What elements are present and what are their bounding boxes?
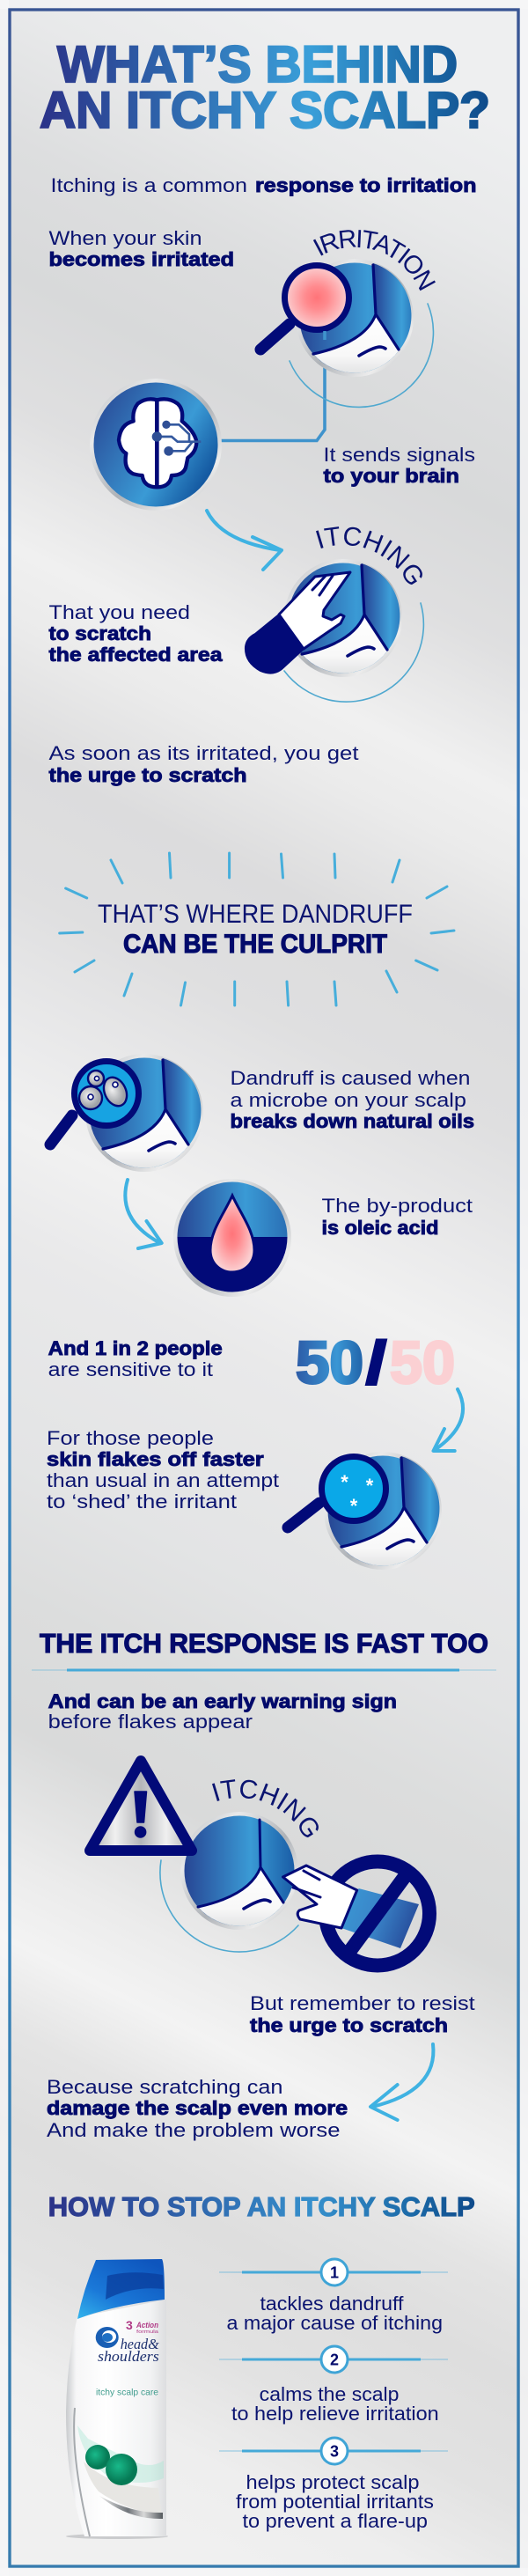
text: skin flakes off faster: to ‘shed’ the irritant (47, 1490, 237, 1512)
text: urge to scratch: the urge to scratch (49, 764, 246, 786)
bottle logo: formula (136, 2329, 158, 2335)
bottle logo: Action (136, 2321, 158, 2329)
icon: warning triangle (90, 1761, 192, 1851)
text: need to scratch (49, 601, 223, 666)
text: 1 in 2 people: are sensitive to it (48, 1358, 213, 1380)
text: dandruff cause (231, 1067, 474, 1132)
step 1: 1 (330, 2264, 339, 2282)
step 2: 2 (330, 2351, 339, 2368)
step 2 (219, 2346, 448, 2425)
text: skin flakes off faster: For those people (47, 1427, 214, 1449)
text: dandruff cause: Dandruff is caused when (231, 1067, 470, 1089)
icon: head for warning: ITCHING (212, 1779, 319, 1838)
arrow: microbe to oleic acid (125, 1180, 162, 1248)
icon: itching head with scratching hand (245, 526, 424, 703)
icon: irritation head with magnifier: IRRITATION (313, 230, 436, 291)
text: skin becomes irritated (49, 227, 234, 270)
heading: dandruff culprit: THAT’S WHERE DANDRUFF (98, 900, 413, 929)
text: 1 in 2 people (48, 1337, 223, 1380)
intro sentence: response to irritation (255, 174, 477, 196)
text: damage the scalp: damage the scalp even more (47, 2097, 348, 2119)
stat: 50/50 (296, 1329, 455, 1396)
bottle logo: head& (121, 2336, 159, 2352)
icon: head with flakes magnifier: * (350, 1495, 358, 1517)
text: resist the urge: But remember to resist (250, 1992, 475, 2014)
icon: oil drop (173, 1179, 291, 1297)
intro sentence (51, 174, 477, 196)
icon: head for warning (159, 1779, 319, 1953)
stat: 50/50: 50 (390, 1329, 455, 1396)
heading: itch response: THE ITCH RESPONSE IS FAST TOO (40, 1628, 488, 1659)
step 3: to prevent a flare-up (243, 2510, 428, 2532)
step 3: from potential irritants (236, 2491, 434, 2513)
icon: irritation head with magnifier (255, 230, 436, 408)
step 3: helps protect scalp (246, 2471, 419, 2493)
text: need to scratch: to scratch (49, 622, 151, 644)
title: AN ITCHY SCALP? (40, 82, 490, 139)
bottle logo: itchy scalp care (96, 2388, 158, 2398)
text: early warning: before flakes appear (48, 1711, 253, 1733)
text: skin flakes off faster: than usual in an attempt (47, 1469, 279, 1491)
text: sends signals (324, 444, 475, 487)
text: damage the scalp (47, 2076, 348, 2141)
icon: head with flakes magnifier: * (341, 1471, 348, 1493)
step 1: a major cause of itching (227, 2312, 443, 2334)
text: urge to scratch: As soon as its irritated, you get (49, 742, 359, 764)
bottle logo (96, 2318, 159, 2398)
text: sends signals: It sends signals (324, 444, 475, 466)
title (40, 36, 490, 139)
icon: head with flakes magnifier (288, 1452, 442, 1570)
step 2: to help relieve irritation (231, 2403, 439, 2425)
text: damage the scalp: And make the problem worse (47, 2119, 341, 2141)
stat: 50/50: / (366, 1329, 386, 1396)
intro sentence: Itching is a common (51, 174, 247, 196)
arrow: resist to damage (370, 2044, 433, 2120)
text: skin flakes off faster (47, 1427, 279, 1512)
title: WHAT’S BEHIND (57, 36, 458, 93)
text: dandruff cause: a microbe on your scalp (231, 1089, 466, 1111)
text: early warning (48, 1690, 397, 1733)
icon: head with microbes magnifier (50, 1054, 203, 1172)
text: by-product (322, 1195, 473, 1239)
text: need to scratch: the affected area (49, 644, 223, 666)
text: need to scratch: That you need (49, 601, 190, 623)
bottle logo: 3 (126, 2318, 133, 2332)
text: 1 in 2 people: And 1 in 2 people (48, 1337, 223, 1359)
sunburst ticks (60, 853, 454, 1005)
icon: itching head with scratching hand: ITCHING (316, 526, 422, 585)
heading: dandruff culprit (98, 900, 413, 959)
text: skin becomes irritated: becomes irritated (49, 248, 234, 270)
step 1 (219, 2259, 448, 2334)
text: resist the urge (250, 1992, 475, 2036)
text: skin becomes irritated: When your skin (49, 227, 202, 249)
shampoo bottle (66, 2259, 168, 2539)
arrow: brain to itching (207, 511, 282, 570)
divider (32, 1669, 496, 1671)
step 1: tackles dandruff (260, 2293, 404, 2315)
icon: brain (90, 379, 222, 511)
text: early warning: And can be an early warning sign (48, 1690, 397, 1712)
step 3: 3 (330, 2442, 339, 2460)
text: by-product: The by-product (322, 1195, 473, 1217)
text: by-product: is oleic acid (322, 1217, 438, 1239)
bottle logo: shoulders (98, 2348, 159, 2365)
text: damage the scalp: Because scratching can (47, 2076, 283, 2098)
stat: 50/50: 50 (296, 1329, 363, 1396)
text: resist the urge: the urge to scratch (250, 2014, 448, 2036)
text: dandruff cause: breaks down natural oils (231, 1110, 474, 1132)
step 3 (219, 2438, 448, 2532)
text: urge to scratch (49, 742, 359, 786)
arrow: 50/50 to flakes (433, 1389, 463, 1451)
step 2: calms the scalp (260, 2383, 400, 2405)
heading: dandruff culprit: CAN BE THE CULPRIT (123, 930, 387, 959)
text: sends signals: to your brain (324, 465, 459, 487)
icon: head with flakes magnifier: * (366, 1475, 374, 1497)
icon: no scratching sign with hand (283, 1861, 429, 1965)
signal line from scalp to brain (188, 333, 325, 440)
text: skin flakes off faster: skin flakes off faster (47, 1448, 264, 1470)
heading: how to stop: HOW TO STOP AN ITCHY SCALP (48, 2191, 475, 2222)
